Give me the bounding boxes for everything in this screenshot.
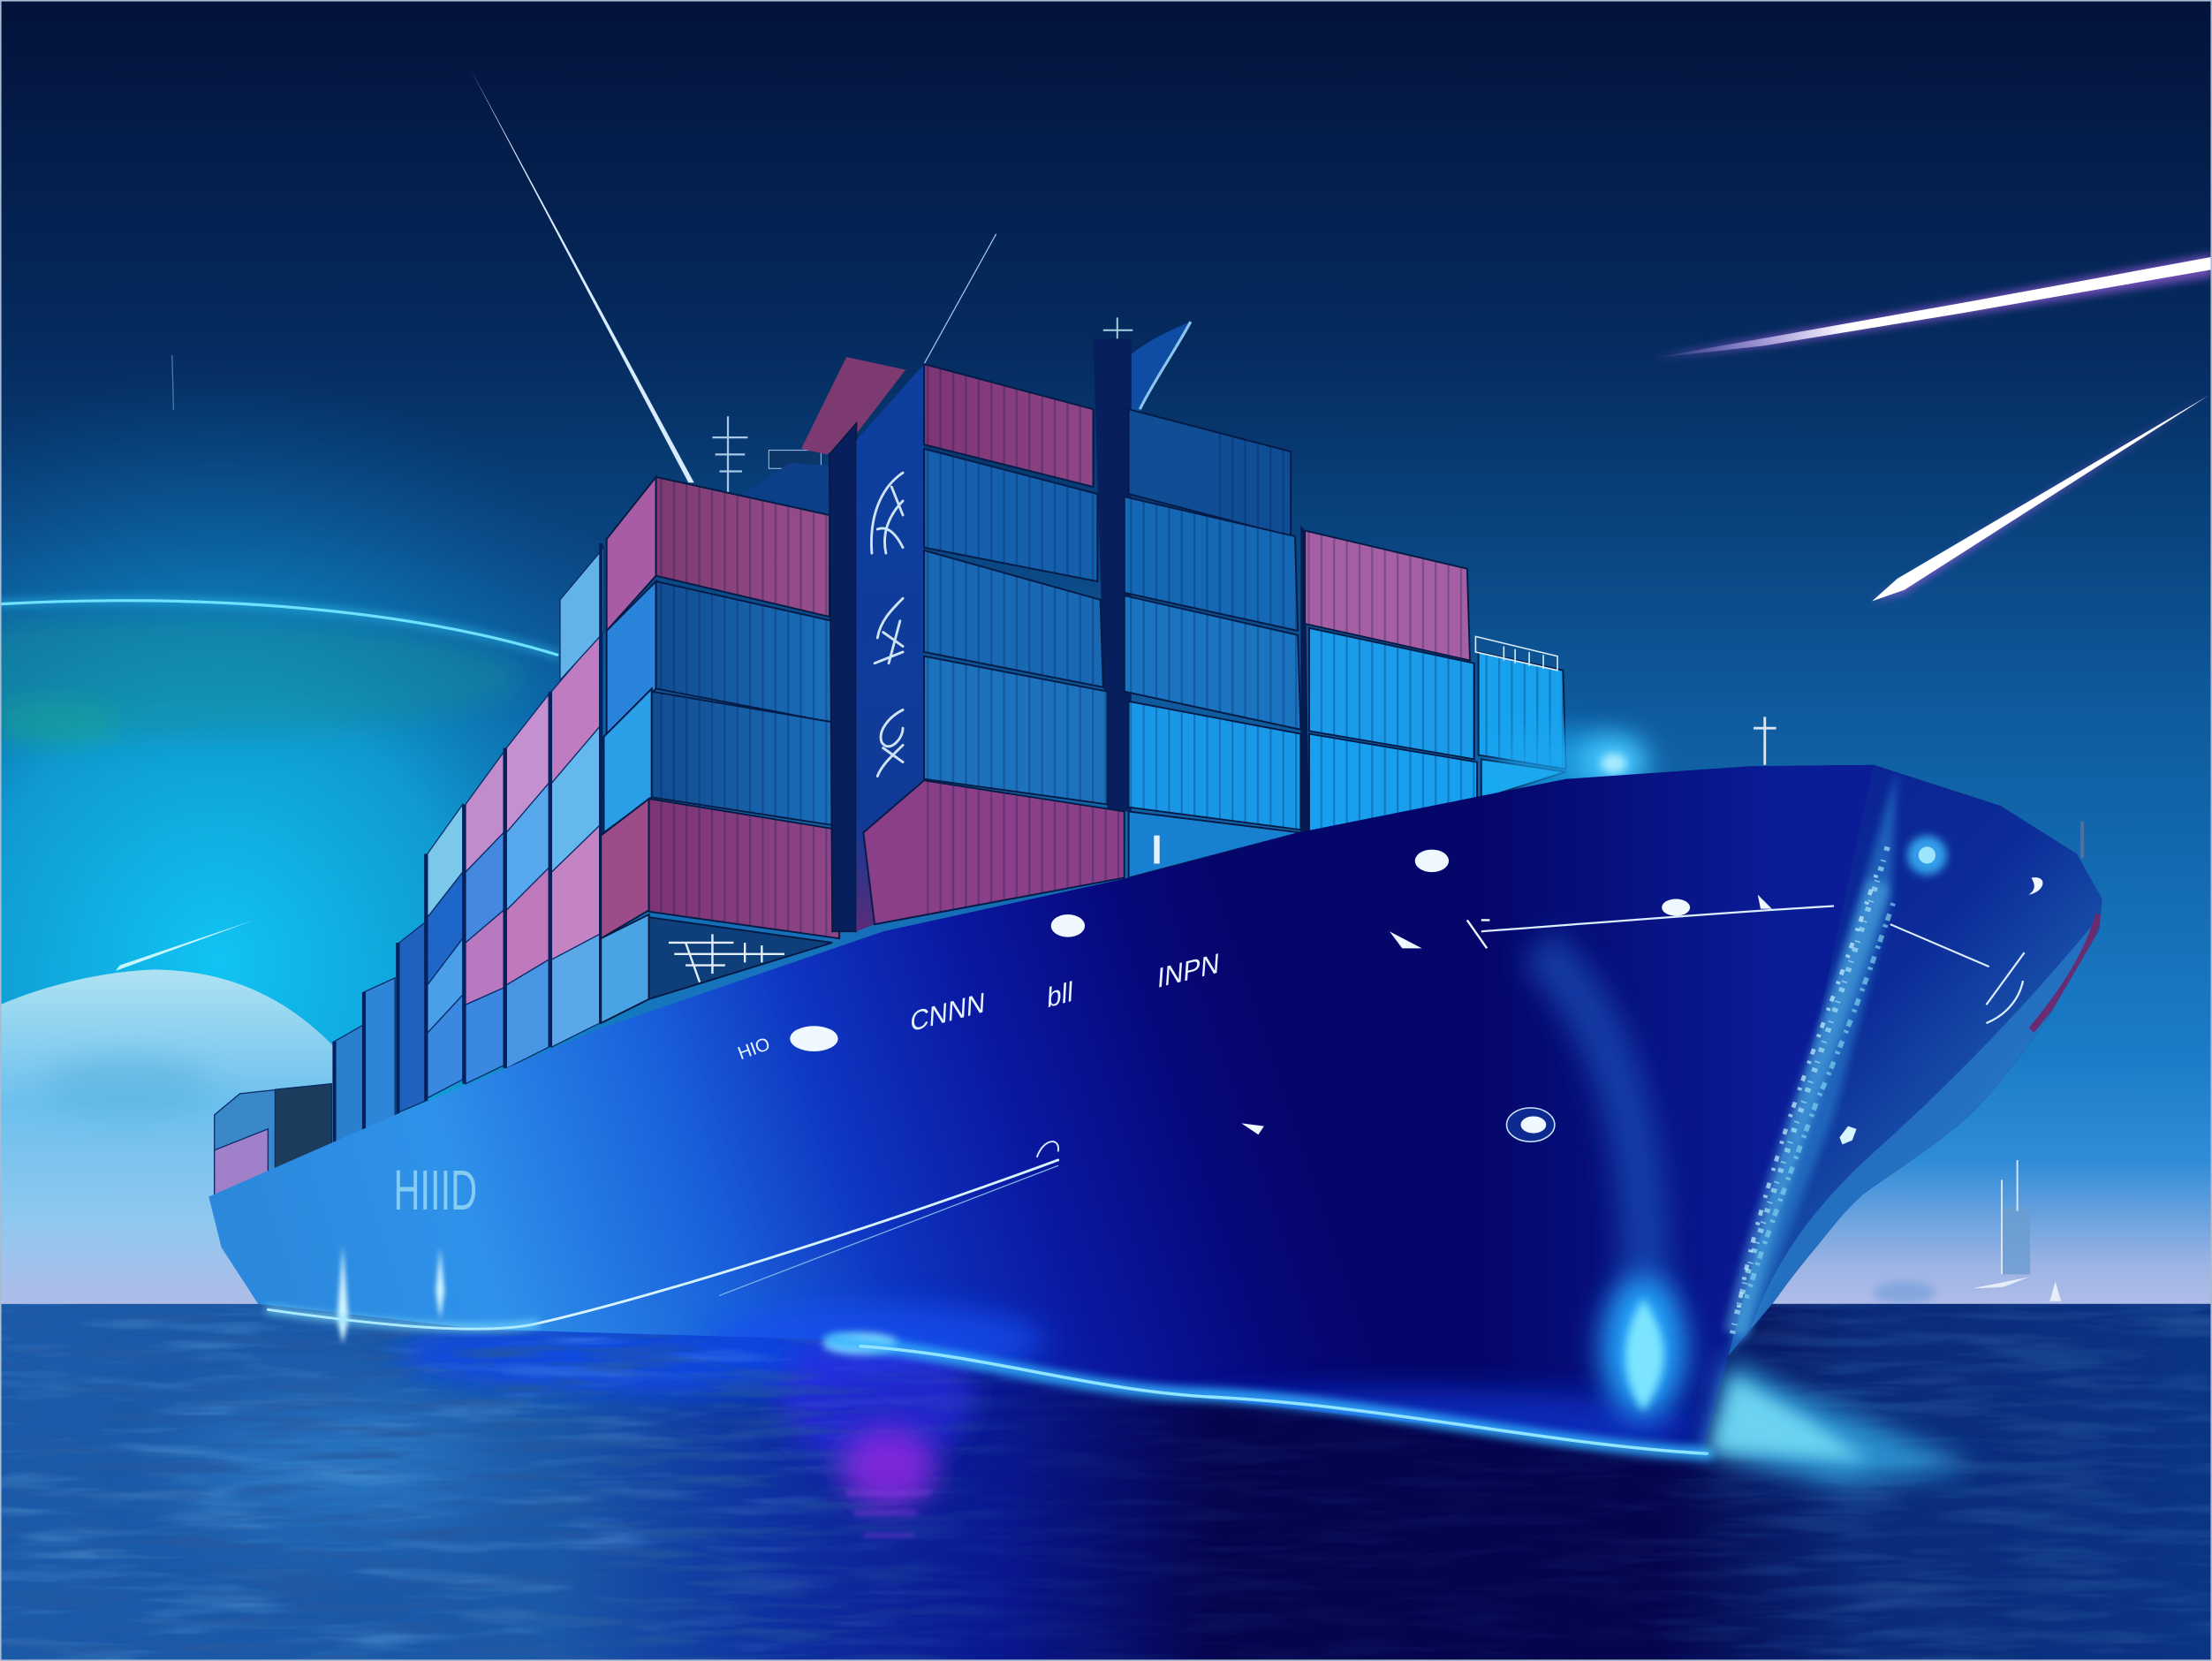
container stack: stern receding columns	[215, 543, 603, 1196]
deck scaffolding under the forward block	[669, 934, 784, 982]
container stack: central tower	[830, 364, 1125, 931]
small deck sign on the forward block	[1475, 636, 1557, 671]
ship name lettering: HIO	[735, 1034, 773, 1064]
moon on the left horizon	[0, 969, 338, 1304]
hull white markings	[790, 850, 2042, 1157]
ship hull	[198, 748, 2116, 1468]
distant sailboat on the right horizon	[1874, 1160, 2061, 1304]
container stack: midships block	[1125, 409, 1309, 878]
container stack: forward pink and blue block	[1305, 531, 1566, 832]
hull lights	[337, 836, 1947, 1418]
ship name lettering	[394, 947, 1221, 1222]
bow splash	[1707, 1354, 1975, 1484]
light streak: right	[1872, 392, 2212, 601]
container stack: forward block	[601, 477, 839, 1023]
ship name lettering: HIIID	[394, 1159, 477, 1222]
background: night sky	[0, 0, 2212, 1304]
masts and bridge equipment	[712, 317, 2082, 858]
container emblems on the tower	[871, 473, 903, 777]
glowing arc and sky streaks	[0, 71, 996, 971]
glow behind the bow deck	[1496, 731, 1648, 793]
ship name lettering: CNNN	[910, 986, 986, 1038]
funnel column	[1094, 338, 1132, 811]
container stack: rear pink top	[801, 357, 905, 454]
sea	[0, 1304, 2212, 1661]
ship name lettering: INPN	[1156, 947, 1221, 994]
bow stem spray	[1728, 770, 1898, 1354]
hull waterline glow	[268, 1160, 1707, 1453]
ship name lettering: bll	[1047, 975, 1074, 1014]
light streak: upper right	[1650, 254, 2212, 359]
